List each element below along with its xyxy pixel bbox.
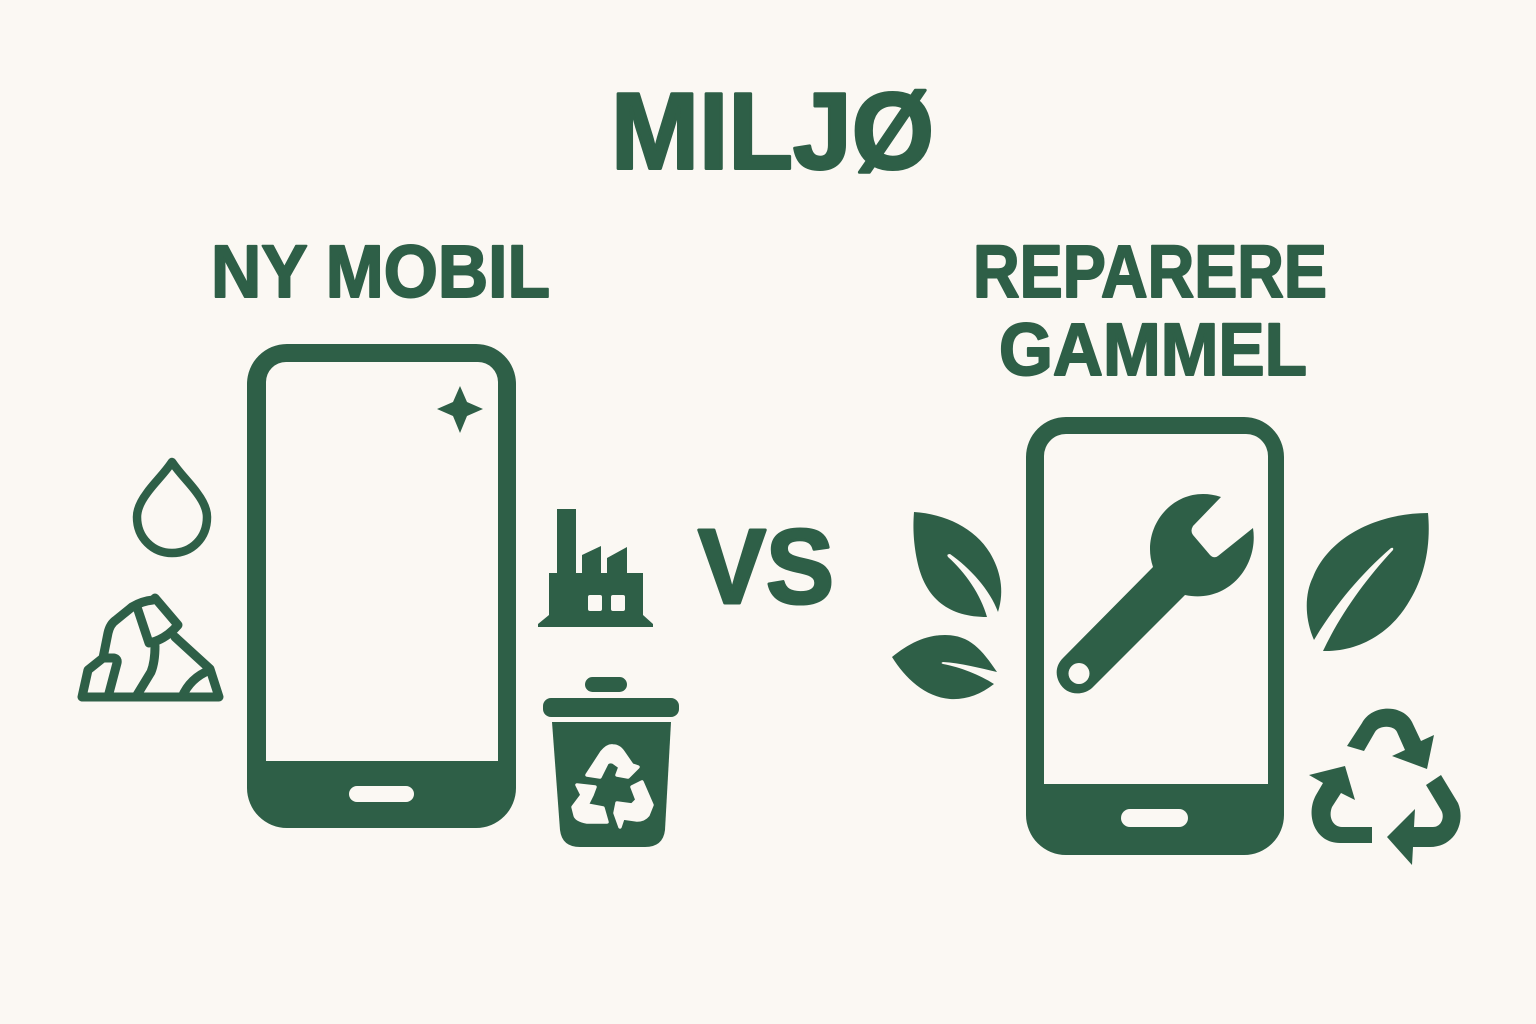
icon: factory [538,509,653,627]
versus label: VS [698,508,834,626]
title: MILJØ [611,70,934,192]
icon: upper left leaf [913,512,1001,617]
icon: rocks and minerals [82,598,219,697]
heading: repair old phone: REPARERE [973,230,1327,313]
heading: new phone: NY MOBIL [211,230,550,313]
icon: sparkle [437,386,483,433]
heading: repair old phone: GAMMEL [999,308,1307,391]
icon: water drop [137,462,207,553]
icon: lower left leaf [892,635,997,699]
icon: wrench [1057,494,1254,693]
icon: large right leaf [1307,513,1429,651]
heading: repair old phone [973,230,1327,391]
icon: recycling bin [543,677,679,847]
icon: new phone [247,344,516,828]
icon: recycling arrows [1309,709,1461,865]
icon: repaired phone [1026,417,1284,855]
